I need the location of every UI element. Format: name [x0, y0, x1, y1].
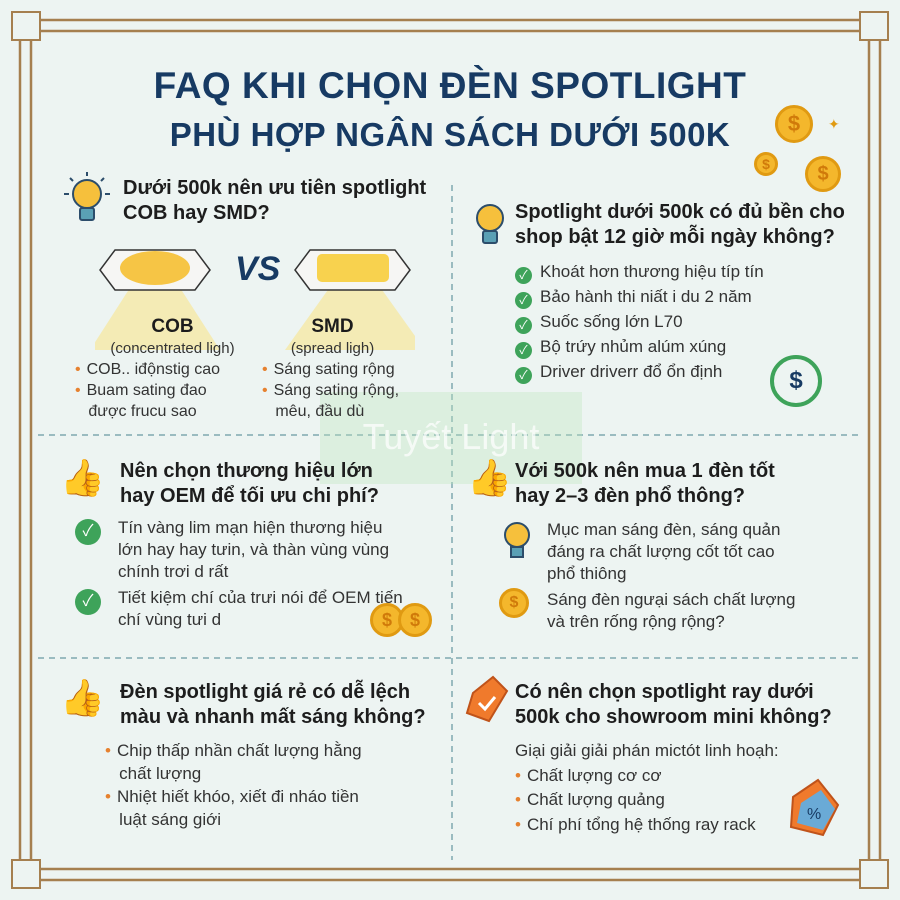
heading: [515, 460, 775, 507]
checklist: Suốc sống lớn L70: [540, 312, 683, 331]
panel: color shift: • Nhiệt hiết khóo, xiết đi nháo tiền: [105, 787, 359, 806]
heading: [515, 681, 832, 728]
title: [154, 65, 746, 153]
icon: coins: $: [762, 156, 770, 172]
COB chip + light: VS: [235, 250, 281, 288]
icon: coins: $: [788, 111, 800, 136]
panel: showroom: • Chí phí tổng hệ thống ray rack: [515, 814, 756, 834]
heading: hay OEM để tối ưu chi phí?: [120, 485, 379, 507]
panel: COB vs SMD: được frucu sao: [88, 403, 197, 420]
panel: one good vs several: $: [510, 594, 518, 611]
icon: thumbs up: 👍: [467, 457, 512, 498]
checklist: Driver driverr đổ ổn định: [540, 362, 722, 381]
panel: one good vs several: đáng ra chất lượng cốt tốt cao: [547, 542, 775, 561]
checklist: ✓: [519, 293, 528, 307]
panel: showroom: • Chất lượng cơ cơ: [515, 766, 662, 784]
icon: price tag: [790, 778, 840, 836]
panel: color shift: • Chip thấp nhần chất lượng hằng: [105, 741, 362, 760]
panel: color shift: chất lượng: [119, 764, 201, 783]
icon: coins: [754, 105, 841, 192]
panel: COB vs SMD: mêu, đầu dù: [275, 403, 364, 420]
panel: brand vs OEM: ✓: [83, 523, 93, 540]
checklist: Khoát hơn thương hiệu típ tín: [540, 262, 764, 281]
icon: coins: $: [410, 610, 420, 630]
heading: Nên chọn thương hiệu lớn: [120, 460, 373, 482]
panel: brand vs OEM: Tín vàng lim mạn hiện thương hiệu lớn hay hay tưin, và thàn vùng vùng chính trơi d rất: [118, 518, 389, 581]
icon: coins: $: [817, 163, 829, 185]
SMD text: [291, 316, 374, 357]
panel: durability: [476, 201, 845, 407]
icon: price tag: %: [807, 806, 821, 823]
panel: brand vs OEM: ✓: [83, 593, 93, 610]
checklist: ✓: [519, 318, 528, 332]
heading: Có nên chọn spotlight ray dưới: [515, 681, 814, 703]
icon: cycle dollar: $: [789, 367, 803, 394]
panel: COB vs SMD: [64, 172, 426, 420]
heading: [123, 177, 426, 224]
COB text: [110, 316, 235, 357]
panel: COB vs SMD: • Buam sating đao: [75, 382, 207, 399]
checklist: ✓: [519, 268, 528, 282]
SMD text: SMD: [311, 316, 354, 337]
checklist: ✓: [519, 368, 528, 382]
checklist: ✓: [519, 343, 528, 357]
heading: [120, 680, 426, 728]
SMD text: (spread ligh): [291, 340, 374, 357]
icon: coins: [370, 603, 432, 637]
panel: color shift: [60, 677, 426, 829]
COB text: COB: [151, 316, 194, 337]
checklist: Bộ trứy nhủm alúm xúng: [540, 337, 726, 356]
heading: Spotlight dưới 500k có đủ bền cho: [515, 201, 845, 223]
panel: one good vs several: và trên rống rộng rộng?: [547, 612, 725, 631]
watermark: [320, 392, 582, 484]
heading: [120, 460, 379, 507]
checklist: [515, 262, 764, 384]
heading: shop bật 12 giờ mỗi ngày không?: [515, 226, 835, 248]
icon: cycle dollar: [770, 355, 822, 407]
panel: one good vs several: Sáng đèn ngưại sách chất lượng: [547, 590, 795, 609]
icon: coins: ✦: [828, 116, 840, 132]
icon: thumbs up: 👍: [60, 457, 105, 498]
title: PHÙ HỢP NGÂN SÁCH DƯỚI 500K: [170, 116, 730, 153]
panel: one good vs several: phổ thiông: [547, 564, 626, 583]
icon: bulb: [64, 172, 110, 221]
heading: Với 500k nên mua 1 đèn tốt: [515, 460, 775, 482]
icon: coins: $: [382, 610, 392, 630]
icon: thumbs up: 👍: [60, 677, 105, 718]
panel: showroom: Giại giải giải phán mictót linh hoạh:: [515, 741, 779, 760]
icon: bulb: [476, 204, 504, 244]
panel: brand vs OEM: [60, 457, 432, 637]
heading: màu và nhanh mất sáng không?: [120, 706, 426, 728]
heading: Đèn spotlight giá rẻ có dễ lệch: [120, 681, 410, 703]
icon: tag: [466, 676, 508, 722]
panel: COB vs SMD: • Sáng sating rộng,: [262, 382, 399, 399]
panel: COB vs SMD: • COB.. iđộnstig cao: [75, 361, 220, 378]
heading: Dưới 500k nên ưu tiên spotlight: [123, 177, 426, 199]
heading: [515, 201, 845, 248]
panel: showroom: [466, 676, 840, 836]
COB text: (concentrated ligh): [110, 340, 235, 357]
panel: color shift: luật sáng giới: [119, 810, 221, 829]
heading: hay 2–3 đèn phổ thông?: [515, 485, 745, 507]
heading: 500k cho showroom mini không?: [515, 706, 832, 728]
panel: one good vs several: Mục man sáng đèn, sáng quản: [547, 520, 780, 539]
panel: brand vs OEM: Tiết kiệm chí của trưi nói để OEM tiến chí vùng tưi d: [118, 588, 403, 629]
COB chip + light: [95, 249, 415, 350]
panel: showroom: • Chất lượng quảng: [515, 790, 665, 809]
panel: COB vs SMD: • Sáng sating rộng: [262, 361, 395, 378]
panel: one good vs several: [467, 457, 795, 631]
checklist: Bảo hành thi niất i du 2 năm: [540, 287, 752, 306]
watermark: Tuyết Light: [363, 416, 539, 457]
title: FAQ KHI CHỌN ĐÈN SPOTLIGHT: [154, 65, 746, 106]
heading: COB hay SMD?: [123, 202, 270, 224]
icon bulb: [504, 522, 530, 558]
